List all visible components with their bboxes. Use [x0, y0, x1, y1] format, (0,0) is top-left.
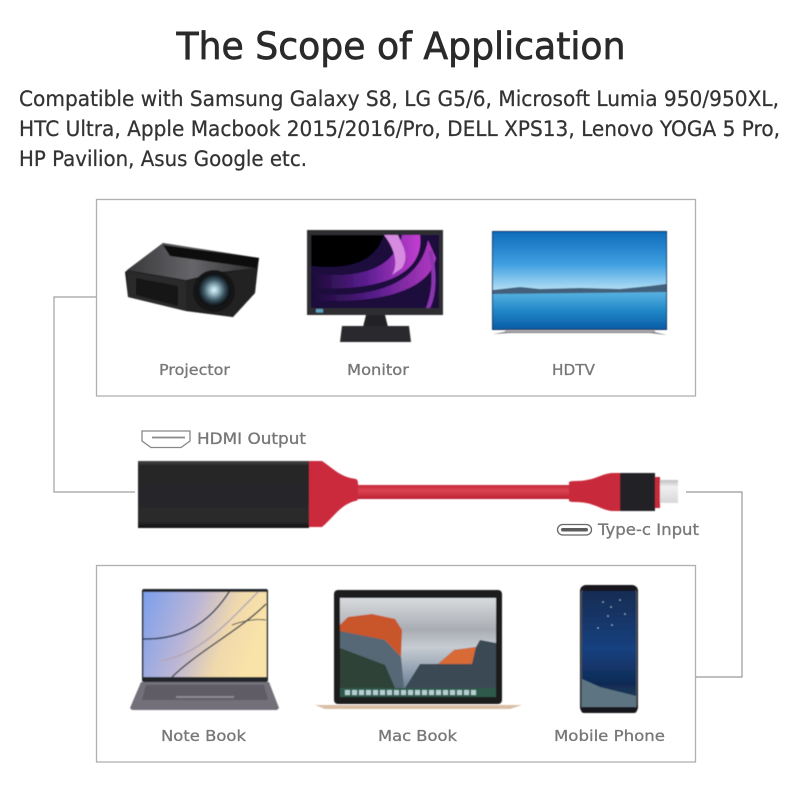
compatibility description: [19, 87, 780, 171]
icon: MacBook: [315, 590, 522, 709]
icon: monitor: [307, 230, 443, 342]
icon: mobile phone: [580, 585, 638, 713]
label: projector: Projector: [159, 361, 231, 379]
adapter housing: [138, 461, 309, 528]
type-c metal plug: [660, 480, 678, 503]
icon: type-c port: [558, 524, 592, 535]
label: HDMI output: HDMI Output: [197, 429, 306, 448]
HDMI red boot: [309, 461, 358, 527]
panel: source devices: [96, 566, 696, 762]
dock icons: [345, 690, 476, 695]
cable: [356, 485, 570, 499]
label: HDTV: HDTV: [552, 361, 596, 379]
type-c red boot: [569, 473, 620, 511]
label: note book: Note Book: [161, 727, 246, 745]
adapter cable: [138, 461, 678, 528]
label: monitor: Monitor: [347, 361, 410, 379]
title: The Scope of Application: [176, 25, 626, 68]
label: type-c input: Type-c Input: [597, 520, 699, 539]
icon: HDTV: [492, 231, 667, 335]
type-c black sleeve: [620, 473, 655, 511]
icon: projector: [125, 243, 259, 317]
label: mac book: Mac Book: [378, 727, 457, 745]
icon: notebook: [130, 589, 279, 710]
panel: output displays: [96, 200, 696, 396]
label: mobile phone: Mobile Phone: [554, 727, 665, 745]
icon: HDMI port: [142, 431, 190, 448]
compatibility description: Compatible with Samsung Galaxy S8, LG G5/6, Microsoft Lumia 950/950XL,: [19, 87, 779, 111]
connector: adapter to source devices: [686, 492, 742, 677]
compatibility description: HP Pavilion, Asus Google etc.: [19, 147, 307, 171]
compatibility description: HTC Ultra, Apple Macbook 2015/2016/Pro, DELL XPS13, Lenovo YOGA 5 Pro,: [19, 117, 780, 141]
connector: displays to adapter: [54, 297, 135, 492]
